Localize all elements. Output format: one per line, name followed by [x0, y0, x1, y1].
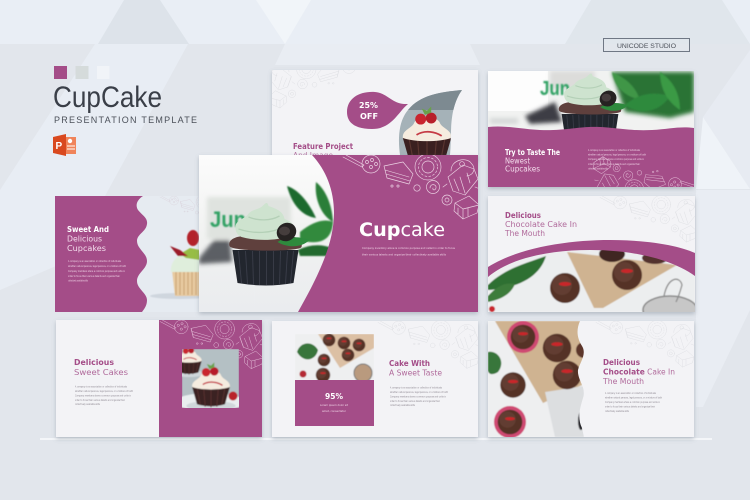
heading [505, 212, 576, 236]
heading: Sweet Cakes [74, 368, 128, 377]
heading: Cupcakes [505, 164, 540, 174]
panel: cake with a sweet taste slide [272, 320, 479, 437]
body text: collectively available skills [390, 403, 415, 407]
body text [362, 247, 455, 256]
panel: delicious sweet cakes slide [56, 319, 264, 437]
heading [389, 359, 442, 378]
heading: Chocolate Cake In [505, 220, 577, 229]
cupcake photo [182, 349, 239, 408]
purple block [159, 320, 262, 437]
heading: Delicious [67, 234, 102, 244]
body text: whether natural persons, legal persons, or a mixture of both [68, 264, 126, 268]
body text: order to focus their various talents and organize their [588, 162, 641, 166]
body text: A company is an association or collection of individuals [605, 391, 656, 395]
heading: Try to Taste The [505, 148, 560, 157]
icon: PowerPoint: P [56, 141, 62, 152]
heading: A Sweet Taste [389, 368, 442, 378]
cupcake photo leaf [399, 90, 462, 155]
body text: A company is an association or collection of individuals [390, 386, 442, 390]
doodles [160, 196, 199, 214]
mint cupcake [558, 74, 626, 130]
body text: whether natural persons, legal persons, or a mixture of both [605, 396, 662, 400]
chocolate photo [295, 334, 374, 382]
heading [602, 358, 675, 386]
doodles [343, 154, 480, 219]
body text [68, 259, 126, 282]
body text: collectively available skills [75, 402, 100, 406]
purple arc [488, 240, 695, 277]
body text: whether natural persons, legal persons, or a mixture of both [75, 389, 133, 393]
doodles grey [378, 320, 479, 368]
body text: collectively available skills [605, 409, 629, 413]
heading: Sweet And [67, 225, 109, 234]
body text: order to focus their various talents and organize their [605, 404, 656, 408]
panel: main cupcake slide [199, 154, 480, 312]
body text: Company members share a common purpose and unite in [588, 157, 644, 161]
body text: Company members share a common purpose and unite in [390, 394, 446, 398]
heading: Chocolate Cake In [603, 368, 675, 376]
panel: delicious chocolate slide [488, 320, 695, 438]
panel: chocolate cake slide [488, 195, 699, 324]
body text: Company members share a common purpose and unite in [68, 269, 125, 273]
heading: Cupcakes [67, 244, 106, 253]
body text: whether natural persons, legal persons, or a mixture of both [390, 390, 448, 394]
body text: A company is an association or collection of individuals [588, 148, 640, 152]
panel: try to taste slide: Jun [540, 78, 570, 100]
discount blob: 25% [359, 101, 378, 110]
heading [74, 358, 128, 377]
blurred photo background [199, 197, 291, 264]
doodles [160, 319, 264, 369]
stat caption [320, 403, 348, 413]
body text: order to focus their various talents and organize their [75, 398, 126, 402]
doodles grey [600, 195, 699, 242]
mint cupcake [229, 203, 310, 286]
purple wave [55, 196, 147, 312]
body text: order to focus their various talents and organize their [390, 399, 441, 403]
doodles grey [272, 70, 355, 108]
stat caption: Lorem ipsum dolor sit [320, 403, 348, 407]
heading: Delicious [603, 358, 640, 367]
body text: their various talents and organize their collectively available skills [362, 252, 447, 256]
body text: Company members share a common purpose and unite in [605, 400, 660, 404]
leaves [287, 182, 333, 256]
heading: Newest [505, 156, 530, 166]
purple wave [488, 126, 694, 187]
studio badge: UNICODE STUDIO [617, 43, 676, 50]
logo swatches [54, 66, 110, 79]
body text [75, 384, 133, 406]
heading: Cake With [389, 359, 430, 368]
body text [390, 386, 448, 407]
body text: A company is an association or collection of individuals [68, 259, 121, 263]
doodles [593, 156, 694, 187]
body text: collectively available skills [68, 278, 88, 282]
panel: feature project slide [270, 70, 480, 162]
floor line [40, 438, 712, 440]
purple stat block [295, 380, 374, 426]
title: CupCake [53, 81, 162, 114]
body text [605, 391, 662, 413]
doodles grey [596, 320, 695, 367]
chocolate photo [488, 321, 592, 438]
heading: The Mouth [602, 377, 644, 386]
purple shape [298, 155, 478, 312]
studio badge [604, 38, 690, 52]
body text: A company is an association or collection of individuals [75, 384, 127, 388]
discount blob: OFF [360, 112, 378, 121]
icon: PowerPoint [53, 134, 76, 156]
panel: try to taste slide [488, 71, 696, 205]
subtitle: PRESENTATION TEMPLATE [54, 115, 197, 125]
body text [588, 148, 646, 170]
leaves [612, 72, 680, 111]
heading: And Image [293, 151, 333, 160]
body text: Company inventory alone is common purpose and called in order to focus [362, 246, 456, 250]
heading [505, 148, 560, 174]
heading: Feature Project [293, 142, 353, 151]
title: Cupcake [359, 219, 445, 241]
stat: 95% [325, 392, 343, 401]
body text: whether natural persons, legal persons, or a mixture of both [588, 152, 646, 156]
body text: Company members share a common purpose and unite in [75, 394, 131, 398]
body text: order to focus their various talents and organize their [68, 274, 121, 278]
cupcake photo [150, 229, 199, 299]
heading: The Mouth [504, 229, 545, 238]
heading: Delicious [74, 358, 114, 367]
body text: collectively available skills [588, 166, 608, 170]
heading: Delicious [505, 211, 541, 220]
panel: sweet and delicious slide [55, 196, 199, 312]
photo [488, 250, 695, 312]
stat caption: amet, consectetur [322, 409, 347, 413]
heading [67, 225, 109, 253]
discount blob [347, 92, 408, 129]
heading [293, 142, 353, 160]
blurred sign letters: Jun [210, 207, 246, 232]
blurred background [490, 71, 694, 124]
